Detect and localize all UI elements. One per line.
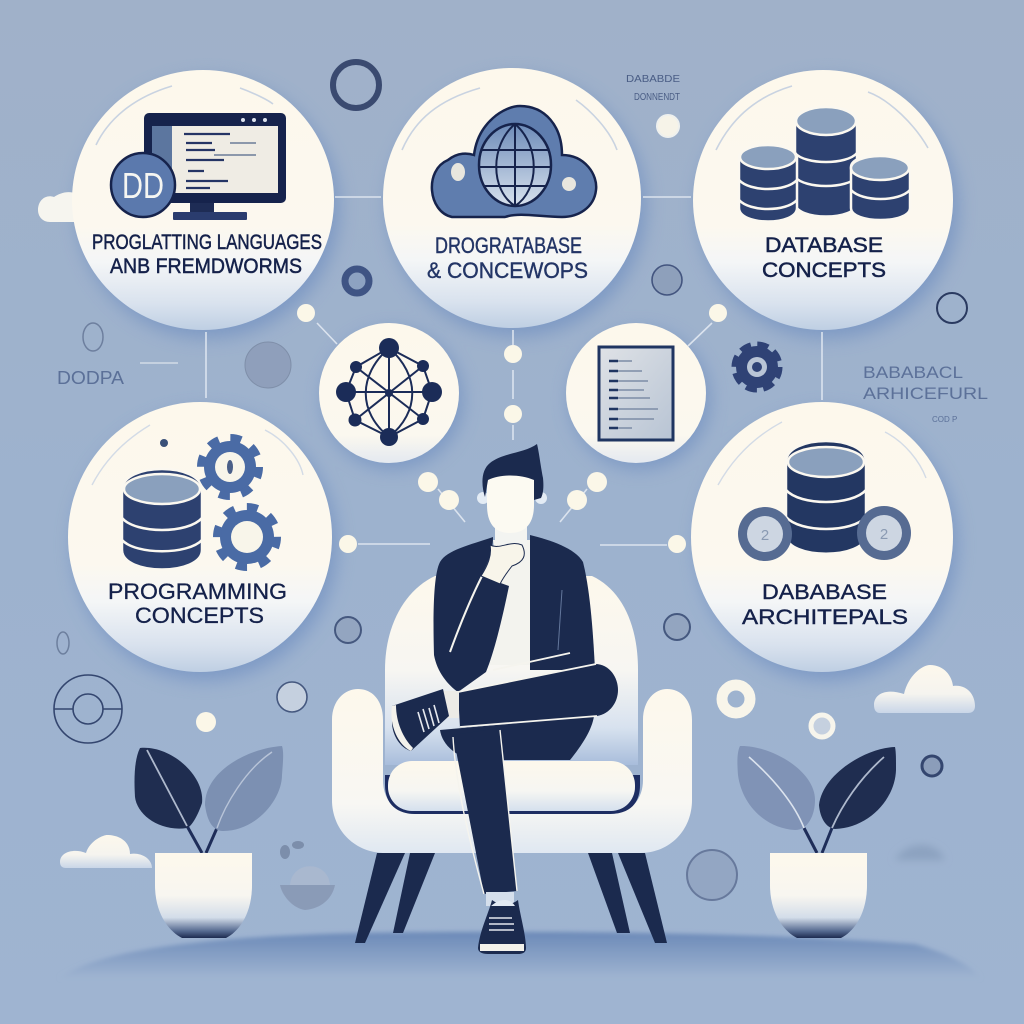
small text: top right: DONNENDT — [634, 92, 680, 103]
shirt — [478, 540, 530, 665]
icon: cloud and globe — [432, 106, 596, 217]
label: DATABASE — [765, 234, 883, 257]
icon: DD badge: DD — [122, 165, 164, 206]
bubble: database concepts — [693, 70, 953, 330]
icon: side nodes — [738, 506, 911, 561]
icon: side nodes: 2 — [761, 527, 769, 544]
person — [391, 444, 618, 954]
connector lines — [206, 197, 822, 545]
plant: left — [135, 746, 283, 938]
chair base and arms — [332, 689, 692, 853]
icon: gears — [201, 438, 277, 567]
icon: central database — [786, 441, 866, 554]
icon: side nodes: 2 — [880, 526, 888, 543]
label — [108, 579, 287, 628]
label: PROGLATTING LANGUAGES — [92, 231, 322, 254]
bubble: programming languages and frameworks — [72, 70, 334, 330]
sock — [486, 892, 514, 906]
floor band — [60, 932, 980, 978]
chair legs — [355, 853, 667, 943]
lower torso — [440, 716, 594, 760]
raised shoe — [391, 689, 449, 751]
front shoe — [478, 900, 526, 954]
label: ARCHITEPALS — [742, 606, 908, 629]
jacket — [434, 535, 595, 692]
chair back — [385, 576, 638, 765]
label — [92, 231, 322, 278]
small text: top right: DABABDE — [626, 74, 680, 85]
bubble: network — [319, 323, 459, 463]
label — [742, 581, 908, 629]
icon: database stacks — [739, 107, 910, 222]
cloud: upper left — [38, 192, 90, 222]
bubble: database architecture — [691, 402, 953, 672]
hair — [482, 444, 543, 500]
label: CONCEPTS — [135, 603, 264, 628]
cloud: lower left — [60, 835, 152, 868]
leg highlights — [453, 730, 517, 894]
standing leg — [453, 728, 517, 894]
small text: left: DODPA — [57, 368, 124, 388]
icon: monitor — [144, 113, 286, 220]
icon: DD badge — [111, 153, 175, 217]
label — [762, 234, 886, 282]
armchair — [332, 576, 692, 943]
bubble shadows — [73, 76, 958, 680]
bubble: programming concepts — [68, 402, 332, 672]
crossed leg highlights — [458, 653, 597, 727]
ears — [477, 492, 547, 504]
ankle — [443, 691, 459, 718]
bubble: document — [566, 323, 706, 463]
label: DROGRATABASE — [435, 233, 582, 258]
label — [427, 233, 588, 283]
small text: top right — [626, 74, 680, 103]
icon: document — [599, 347, 673, 440]
icon: network globe — [336, 338, 442, 446]
hand — [481, 544, 524, 584]
label: ANB FREMDWORMS — [110, 255, 302, 278]
label: DABABASE — [762, 581, 887, 604]
label: & CONCEWOPS — [427, 258, 588, 283]
face — [487, 475, 534, 533]
small text: right — [863, 363, 988, 403]
connector dots — [196, 304, 727, 732]
small text: right: ARHICEFURL — [863, 384, 988, 403]
label: PROGRAMMING — [108, 579, 287, 604]
bubble: database and concepts — [383, 68, 641, 328]
cloud: right — [874, 665, 975, 713]
small text: right: BABABACL — [863, 363, 963, 382]
decorative icons — [54, 62, 967, 910]
seat cushion — [388, 761, 635, 811]
label: CONCEPTS — [762, 259, 886, 282]
icon: database — [122, 469, 202, 570]
seat well — [385, 775, 640, 814]
neck — [495, 520, 527, 545]
crossed leg — [458, 664, 618, 728]
plant: right — [737, 746, 896, 938]
small text: cop: COD P — [932, 415, 957, 424]
